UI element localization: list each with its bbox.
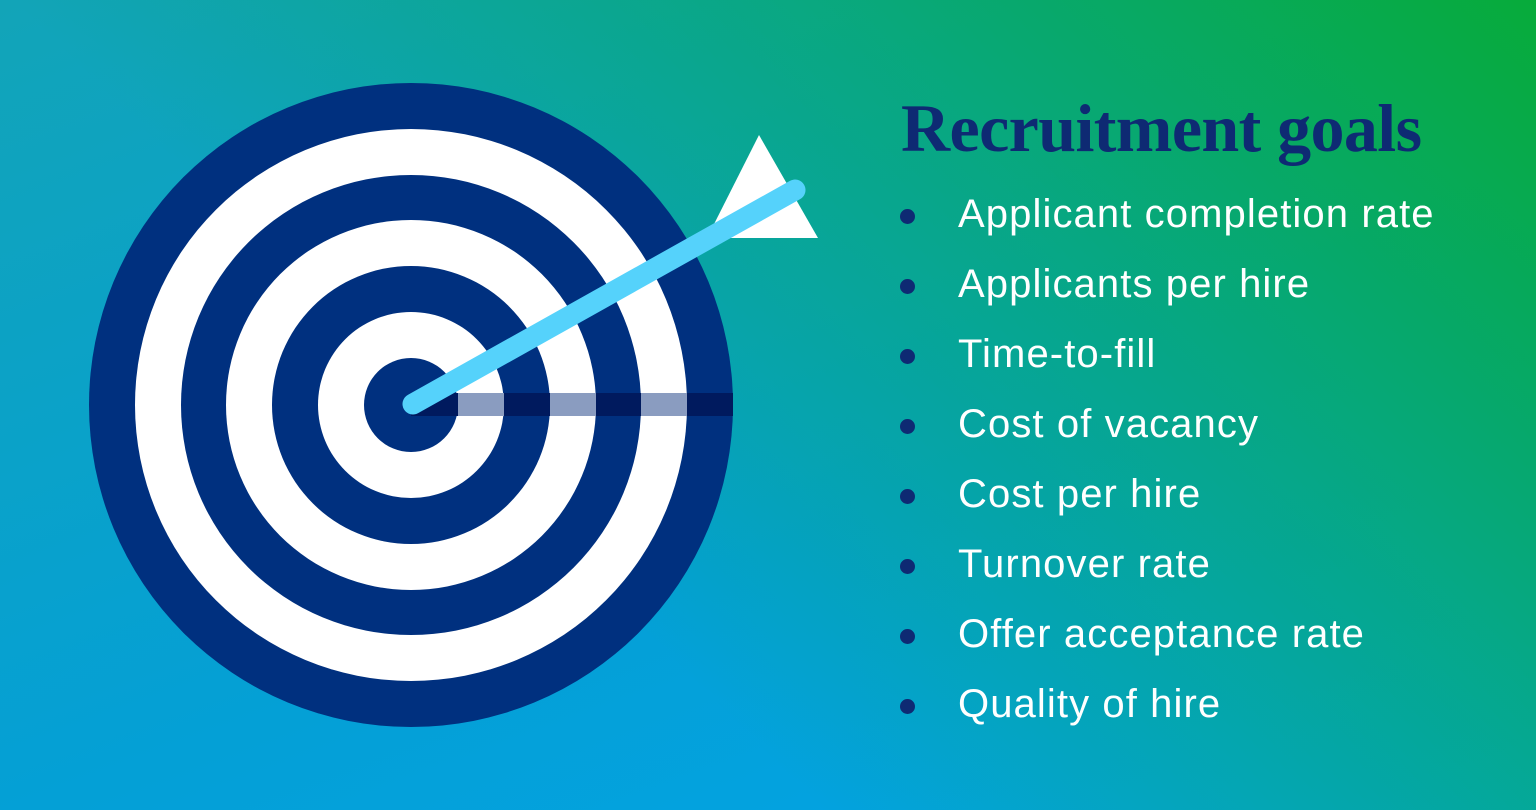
item 2 <box>900 262 1310 306</box>
text: Applicant completion rate <box>958 192 1435 236</box>
text: Offer acceptance rate <box>958 612 1365 656</box>
goals list <box>900 192 1435 726</box>
item 5 <box>900 472 1201 516</box>
text: Cost per hire <box>958 472 1201 516</box>
text: Time-to-fill <box>958 332 1156 376</box>
text: Turnover rate <box>958 542 1211 586</box>
item 7 <box>900 612 1365 656</box>
target with arrow <box>89 83 818 727</box>
item 8 <box>900 682 1221 726</box>
item 1 <box>900 192 1435 236</box>
target rings <box>89 83 733 727</box>
arrow shadow <box>411 393 741 416</box>
title: Recruitment goals <box>901 90 1421 166</box>
text: Cost of vacancy <box>958 402 1259 446</box>
arrowhead <box>707 135 818 238</box>
arrow shaft <box>413 190 795 404</box>
item 3 <box>900 332 1156 376</box>
text: Quality of hire <box>958 682 1221 726</box>
text: Applicants per hire <box>958 262 1310 306</box>
item 6 <box>900 542 1211 586</box>
item 4 <box>900 402 1259 446</box>
